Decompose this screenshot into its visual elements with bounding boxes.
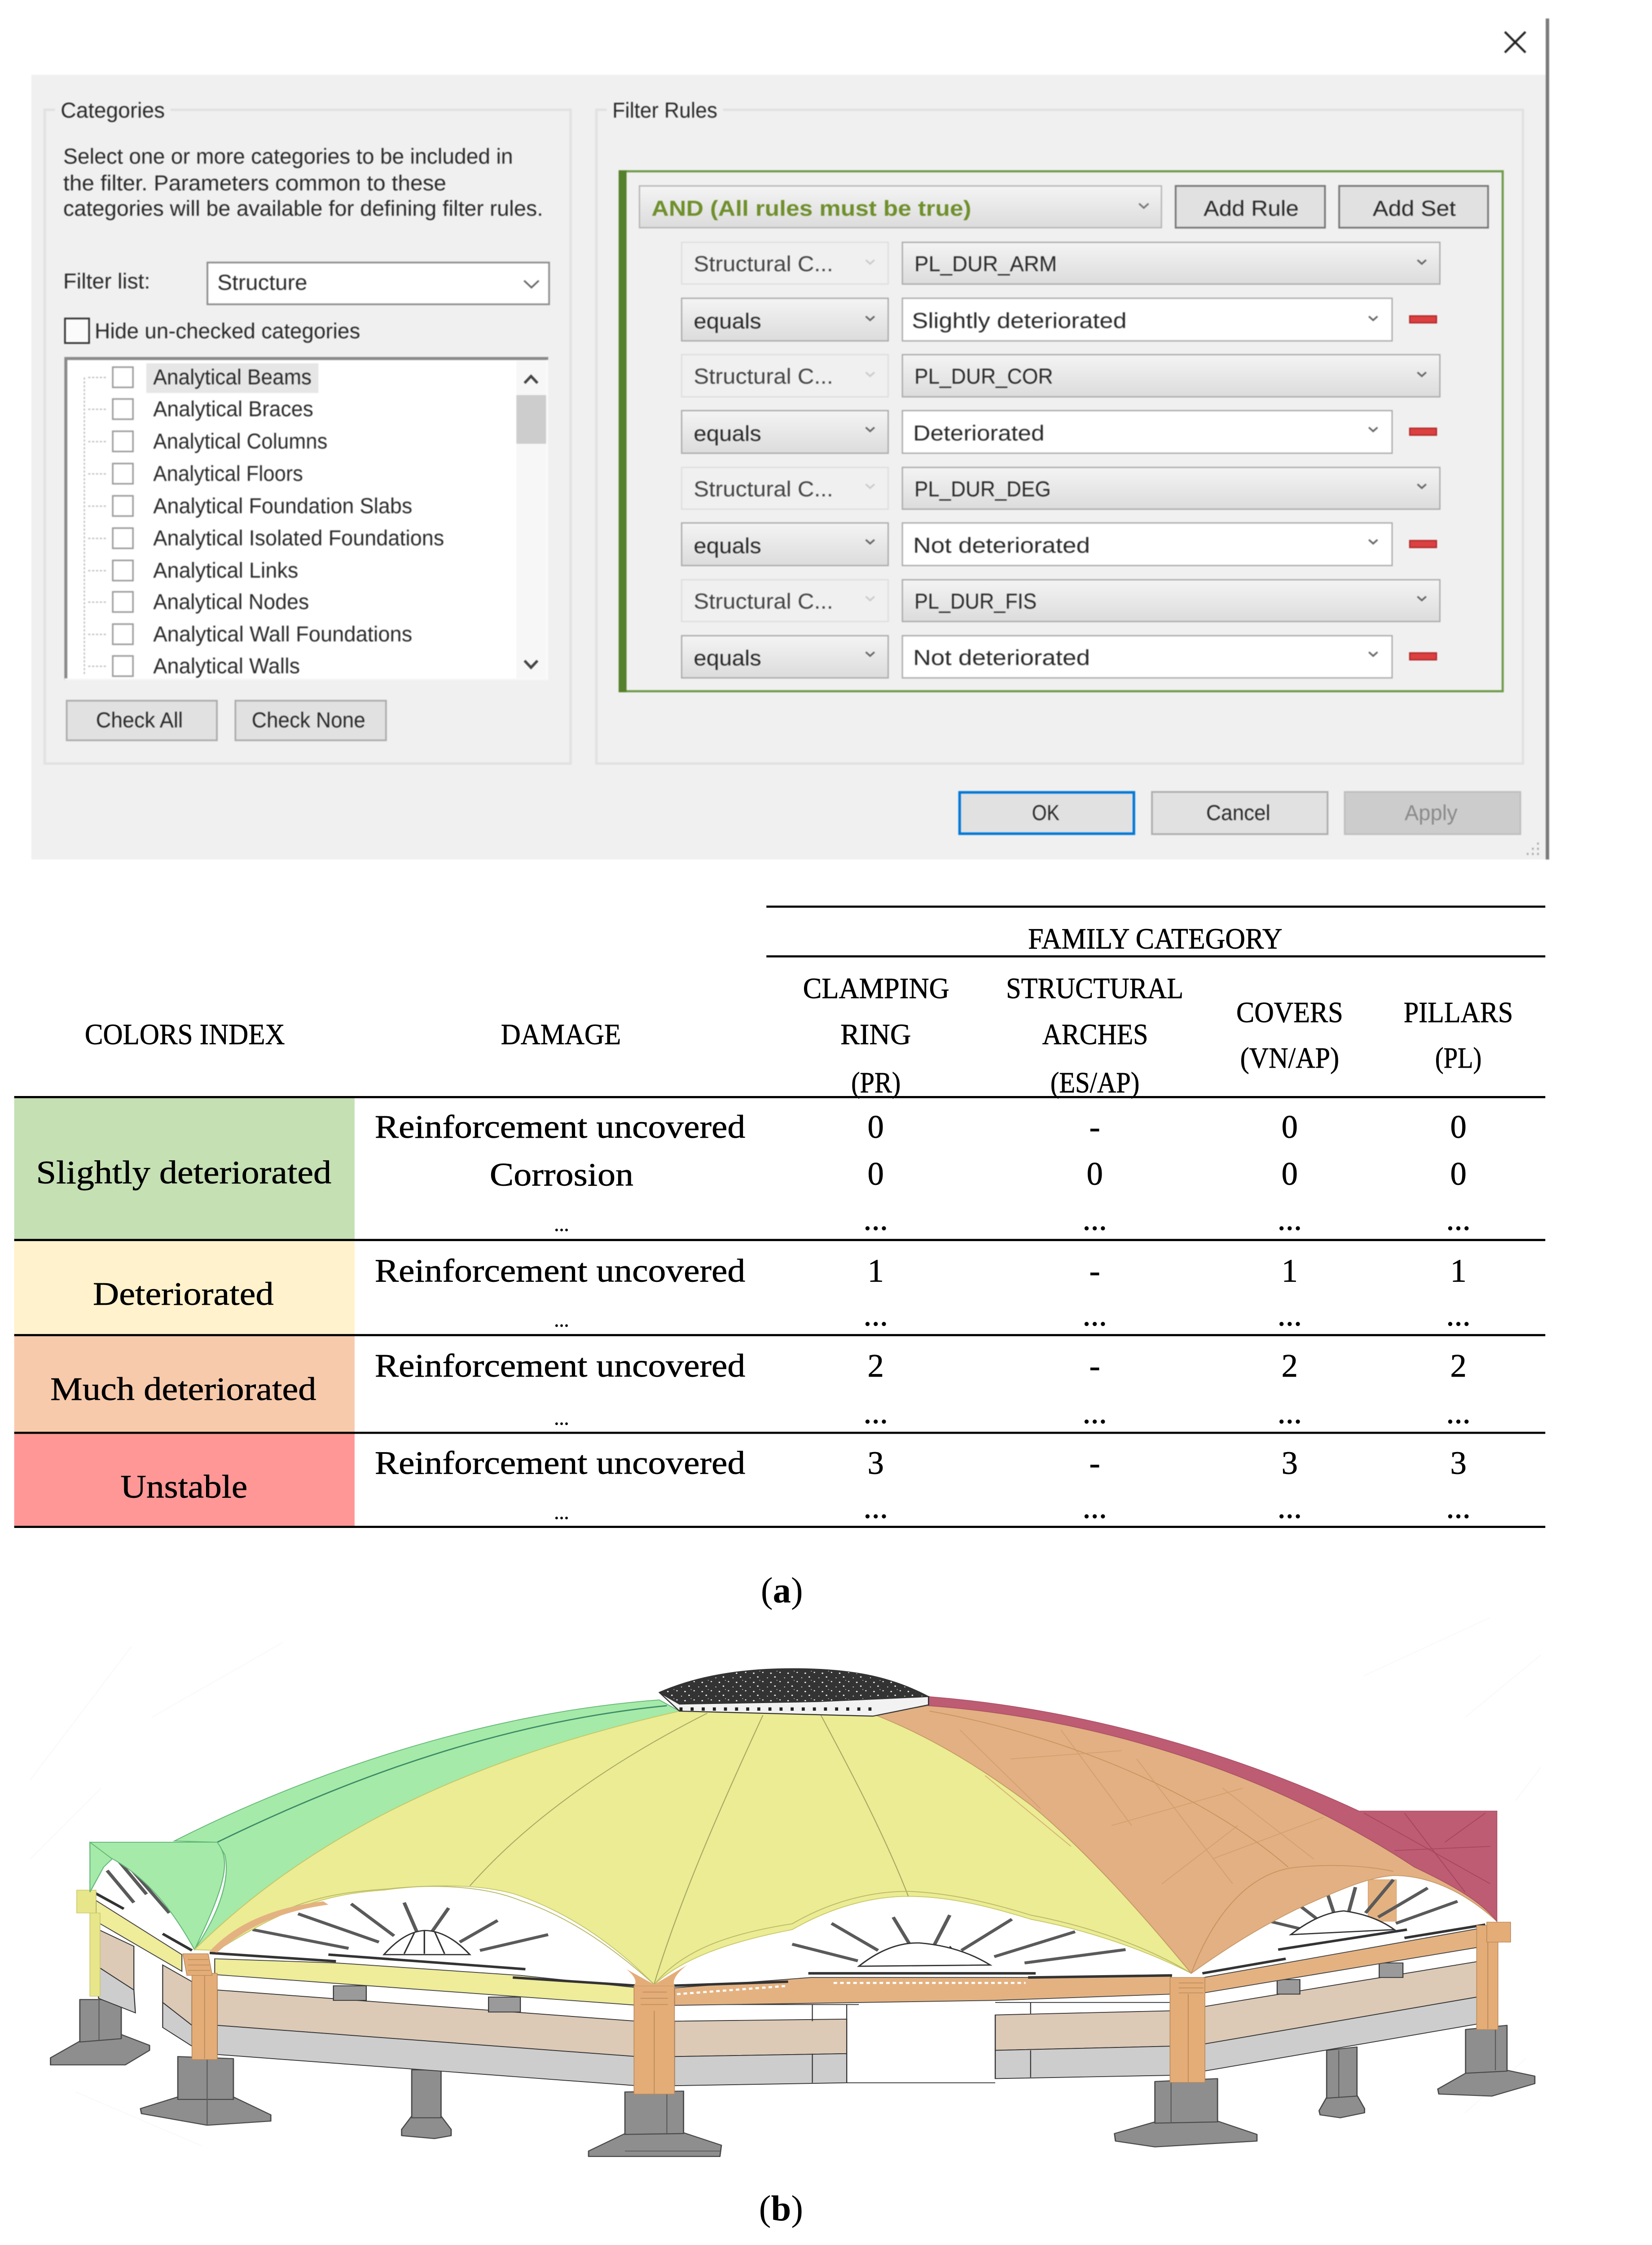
- row: deteriorated: Reinforcement uncovered: [375, 1252, 745, 1289]
- row: much deteriorated: [50, 1347, 1471, 1431]
- row: much deteriorated: Reinforcement uncovered: [375, 1347, 745, 1384]
- table header: FAMILY CATEGORY: [1028, 923, 1283, 955]
- table header: [85, 923, 1513, 1099]
- arch window spokes: [107, 1861, 1458, 1963]
- button: apply: [1345, 792, 1520, 834]
- roof: red panel: [928, 1697, 1497, 1921]
- button: add rule: Add Rule: [1204, 197, 1299, 220]
- list: analytical categories: Analytical Walls: [153, 654, 300, 678]
- checkbox: hide un-checked: Hide un-checked categories: [95, 320, 360, 343]
- row: deteriorated: 1: [1282, 1252, 1298, 1289]
- rule 4: PL_DUR_FIS: Not deteriorated: [913, 646, 1090, 670]
- list: analytical categories: Analytical Isolated Foundations: [153, 527, 444, 550]
- row: deteriorated: 1: [868, 1252, 884, 1289]
- row: much deteriorated: Much deteriorated: [50, 1371, 316, 1407]
- rule 1: PL_DUR_ARM: Structural C...: [694, 252, 833, 276]
- rule 4: PL_DUR_FIS: Structural C...: [694, 590, 833, 614]
- orange pillar flare: [626, 1965, 687, 1986]
- dropdown: AND rule: [639, 186, 1161, 228]
- row: deteriorated: ...: [863, 1296, 888, 1333]
- row: slightly deteriorated: 0: [1282, 1156, 1298, 1192]
- row: much deteriorated: ...: [554, 1407, 569, 1429]
- table header: (ES/AP): [1050, 1067, 1139, 1099]
- rule 1: PL_DUR_ARM: equals: [694, 310, 761, 334]
- oculus: [659, 1668, 928, 1716]
- dropdown: AND rule: AND (All rules must be true): [651, 197, 971, 220]
- rule 1: PL_DUR_ARM: [681, 242, 1440, 341]
- row: deteriorated: Deteriorated: [93, 1276, 274, 1312]
- row: slightly deteriorated: ...: [1446, 1201, 1471, 1237]
- row: much deteriorated: -: [1090, 1347, 1100, 1384]
- row: slightly deteriorated: ...: [1082, 1201, 1107, 1237]
- rule 2: PL_DUR_COR: [681, 355, 1440, 453]
- text block: categories help: [63, 145, 543, 220]
- row: much deteriorated: 2: [1282, 1347, 1298, 1384]
- rule 1: PL_DUR_ARM: PL_DUR_ARM: [914, 252, 1057, 276]
- row: slightly deteriorated: 0: [1450, 1109, 1467, 1145]
- text block: categories help: categories will be available for defining filter rules.: [63, 197, 543, 220]
- table header: STRUCTURAL: [1006, 973, 1183, 1005]
- table header: COLORS INDEX: [85, 1018, 285, 1051]
- panel: filter rules group: [597, 99, 1523, 764]
- row: slightly deteriorated: 0: [868, 1156, 884, 1192]
- roof: orange panel: [873, 1706, 1497, 1973]
- rule 2: PL_DUR_COR: PL_DUR_COR: [914, 365, 1053, 388]
- row: much deteriorated: ...: [1082, 1394, 1107, 1431]
- row: much deteriorated: 2: [1450, 1347, 1467, 1384]
- caption: (a): (a): [761, 1570, 803, 1610]
- row: much deteriorated: 2: [868, 1347, 884, 1384]
- row: slightly deteriorated: [36, 1109, 1471, 1237]
- panel: filter dialog: [31, 18, 1549, 859]
- button: check all: Check All: [96, 709, 183, 732]
- button: OK: [960, 792, 1134, 834]
- table header: (PL): [1435, 1042, 1481, 1074]
- beams: yellow and orange: [96, 1901, 1484, 2005]
- pillar details: [188, 1942, 1488, 2094]
- row: unstable: ...: [863, 1489, 888, 1525]
- rule 3: PL_DUR_DEG: PL_DUR_DEG: [914, 477, 1051, 501]
- table header: RING: [840, 1018, 911, 1051]
- row: unstable: 3: [1450, 1445, 1467, 1481]
- beam top edges: [93, 1892, 1485, 1986]
- table header: COVERS: [1236, 997, 1343, 1029]
- small grey supports: [334, 1963, 1403, 2012]
- rule 3: PL_DUR_DEG: Not deteriorated: [913, 534, 1090, 558]
- icon: close X: [1505, 32, 1525, 53]
- rule 3: PL_DUR_DEG: equals: [694, 534, 761, 558]
- list: analytical categories: Analytical Wall Foundations: [153, 622, 412, 646]
- row: slightly deteriorated: Corrosion: [490, 1156, 633, 1193]
- row: slightly deteriorated: ...: [1278, 1201, 1302, 1237]
- row: much deteriorated: ...: [1278, 1394, 1302, 1431]
- rule 3: PL_DUR_DEG: [681, 467, 1440, 566]
- rule 2: PL_DUR_COR: Deteriorated: [913, 422, 1044, 445]
- row: deteriorated: ...: [1446, 1296, 1471, 1333]
- row: unstable: -: [1090, 1445, 1100, 1481]
- row: much deteriorated: ...: [1446, 1394, 1471, 1431]
- wall band: grey: [98, 1967, 1482, 2086]
- button: add rule: [1176, 186, 1325, 228]
- row: deteriorated: 1: [1450, 1252, 1467, 1289]
- dropdown: structure: [207, 263, 549, 304]
- rule 2: PL_DUR_COR: Structural C...: [694, 365, 833, 388]
- row: unstable: [120, 1445, 1471, 1525]
- button: check all: [67, 701, 217, 740]
- row: unstable: ...: [1082, 1489, 1107, 1525]
- button: add set: Add Set: [1373, 197, 1456, 220]
- row: slightly deteriorated: ...: [863, 1201, 888, 1237]
- gap outline: [674, 2003, 1171, 2083]
- row: unstable: ...: [554, 1501, 569, 1523]
- list: analytical categories: [65, 357, 548, 680]
- row: slightly deteriorated: Slightly deteriorated: [36, 1154, 331, 1191]
- wall band: brown: [98, 1930, 1482, 2056]
- panel: rule set: [619, 171, 1503, 692]
- row: unstable: 3: [1282, 1445, 1298, 1481]
- rule 2: PL_DUR_COR: equals: [694, 422, 761, 446]
- row: unstable: 3: [868, 1445, 884, 1481]
- row: slightly deteriorated: 0: [1450, 1156, 1467, 1192]
- button: check none: [235, 701, 386, 740]
- heading: categories: Categories: [61, 99, 165, 123]
- label: filter list: Filter list:: [63, 269, 150, 293]
- scrollbar: [516, 361, 546, 678]
- button: add set: [1339, 186, 1488, 228]
- table header: (VN/AP): [1240, 1042, 1339, 1074]
- roof: green panel: [174, 1700, 680, 1950]
- button: check none: Check None: [252, 709, 365, 732]
- dropdown: structure: Structure: [217, 271, 307, 295]
- panel: categories group: [45, 99, 571, 764]
- row: unstable: Unstable: [120, 1468, 247, 1505]
- table header: DAMAGE: [501, 1018, 621, 1051]
- row: slightly deteriorated: Reinforcement uncovered: [375, 1109, 745, 1145]
- illustration: coloured dome model: [31, 1617, 1541, 2157]
- table header: (PR): [851, 1067, 901, 1099]
- icon: resize grip: [1527, 844, 1539, 854]
- row: slightly deteriorated: ...: [554, 1214, 569, 1236]
- button: cancel: Cancel: [1206, 801, 1270, 825]
- rule 3: PL_DUR_DEG: Structural C...: [694, 477, 833, 501]
- row: slightly deteriorated: 0: [1086, 1156, 1103, 1192]
- list: analytical categories: Analytical Beams: [153, 365, 312, 389]
- list: analytical categories: Analytical Floors: [153, 462, 303, 486]
- row: deteriorated: ...: [1082, 1296, 1107, 1333]
- button: OK: OK: [1032, 801, 1059, 825]
- button: apply: Apply: [1405, 801, 1458, 825]
- list: analytical categories: Analytical Columns: [153, 430, 327, 453]
- row: slightly deteriorated: 0: [1282, 1109, 1298, 1145]
- row: deteriorated: ...: [1278, 1296, 1302, 1333]
- row: unstable: Reinforcement uncovered: [375, 1445, 745, 1481]
- rule 4: PL_DUR_FIS: equals: [694, 647, 761, 670]
- table header: CLAMPING: [803, 973, 949, 1005]
- rear column in right arch: [1368, 1880, 1397, 1921]
- pillars: [183, 1922, 1511, 2094]
- orange arch edge: [210, 1902, 328, 1953]
- beam highlight dots: [677, 1983, 1026, 1994]
- arch window fans: [384, 1911, 1394, 1966]
- text block: categories help: Select one or more categories to be included in: [63, 145, 513, 168]
- rule 4: PL_DUR_FIS: PL_DUR_FIS: [914, 590, 1037, 614]
- caption: (b): (b): [759, 2188, 803, 2228]
- table: damage colour index: [14, 907, 1545, 1527]
- row: slightly deteriorated: -: [1090, 1109, 1100, 1145]
- rule 1: PL_DUR_ARM: Slightly deteriorated: [912, 309, 1127, 333]
- row: deteriorated: [93, 1252, 1471, 1333]
- row: unstable: ...: [1278, 1489, 1302, 1525]
- heading: filter rules: Filter Rules: [612, 99, 717, 123]
- row: much deteriorated: ...: [863, 1394, 888, 1431]
- table header: ARCHES: [1042, 1018, 1148, 1051]
- list: analytical categories: Analytical Braces: [153, 397, 313, 421]
- pillar: yellow: [77, 1890, 100, 1996]
- row: deteriorated: ...: [554, 1309, 569, 1331]
- row: slightly deteriorated: 0: [868, 1109, 884, 1145]
- list: analytical categories: Analytical Foundation Slabs: [153, 494, 412, 518]
- foundations: [51, 1999, 1535, 2157]
- list: analytical categories: Analytical Nodes: [153, 590, 309, 614]
- roof: green corner: [90, 1842, 224, 1950]
- row: unstable: ...: [1446, 1489, 1471, 1525]
- row: deteriorated: -: [1090, 1252, 1100, 1289]
- text block: categories help: the filter. Parameters common to these: [63, 172, 446, 195]
- list: analytical categories: Analytical Links: [153, 559, 298, 583]
- roof: yellow panels: [194, 1711, 1191, 1985]
- button: cancel: [1152, 792, 1327, 834]
- rule 4: PL_DUR_FIS: [681, 580, 1440, 678]
- table header: PILLARS: [1404, 997, 1513, 1029]
